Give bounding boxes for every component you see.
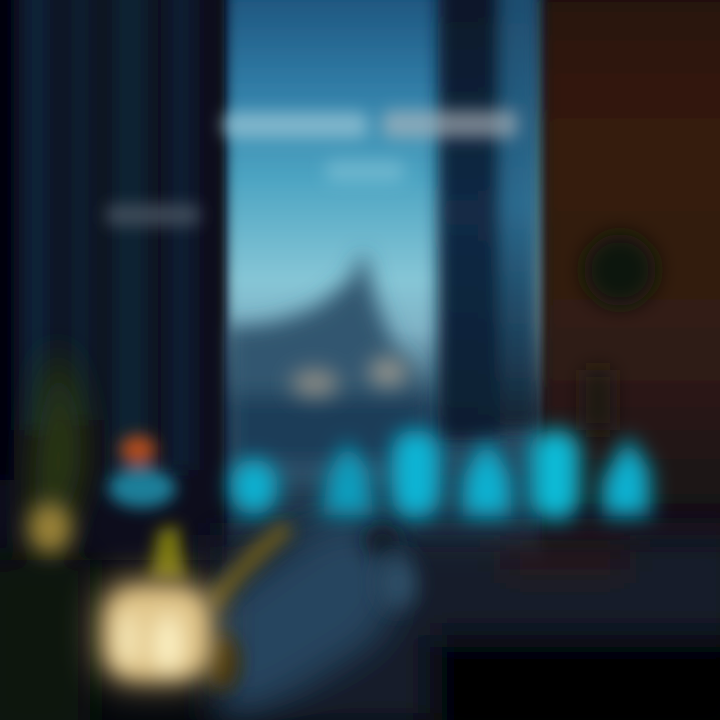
dark vase and highlight on table xyxy=(364,524,416,609)
bottle 7 xyxy=(602,436,650,516)
warm glow on leaf xyxy=(28,502,72,554)
round plant on wall xyxy=(584,234,656,430)
title text band xyxy=(222,110,518,182)
left tower xyxy=(0,0,224,560)
warm city lights xyxy=(291,357,408,397)
floor and table xyxy=(210,525,720,720)
row of glowing blue bottles xyxy=(108,430,650,520)
side label band xyxy=(106,204,200,226)
bottle 1 with orange cap xyxy=(108,435,176,508)
distant mountains and city xyxy=(225,250,432,480)
stems above lantern xyxy=(150,520,295,690)
wood wall panel xyxy=(542,0,720,550)
bottle 2 xyxy=(230,459,278,515)
bottle 3 xyxy=(322,440,374,515)
bottle 5 xyxy=(462,438,512,516)
bottle 4 xyxy=(392,430,440,518)
bottle 6 xyxy=(530,430,580,520)
greenery on left xyxy=(0,345,90,720)
glowing lantern xyxy=(100,580,212,682)
window sky xyxy=(224,0,544,580)
right tower xyxy=(438,0,538,440)
